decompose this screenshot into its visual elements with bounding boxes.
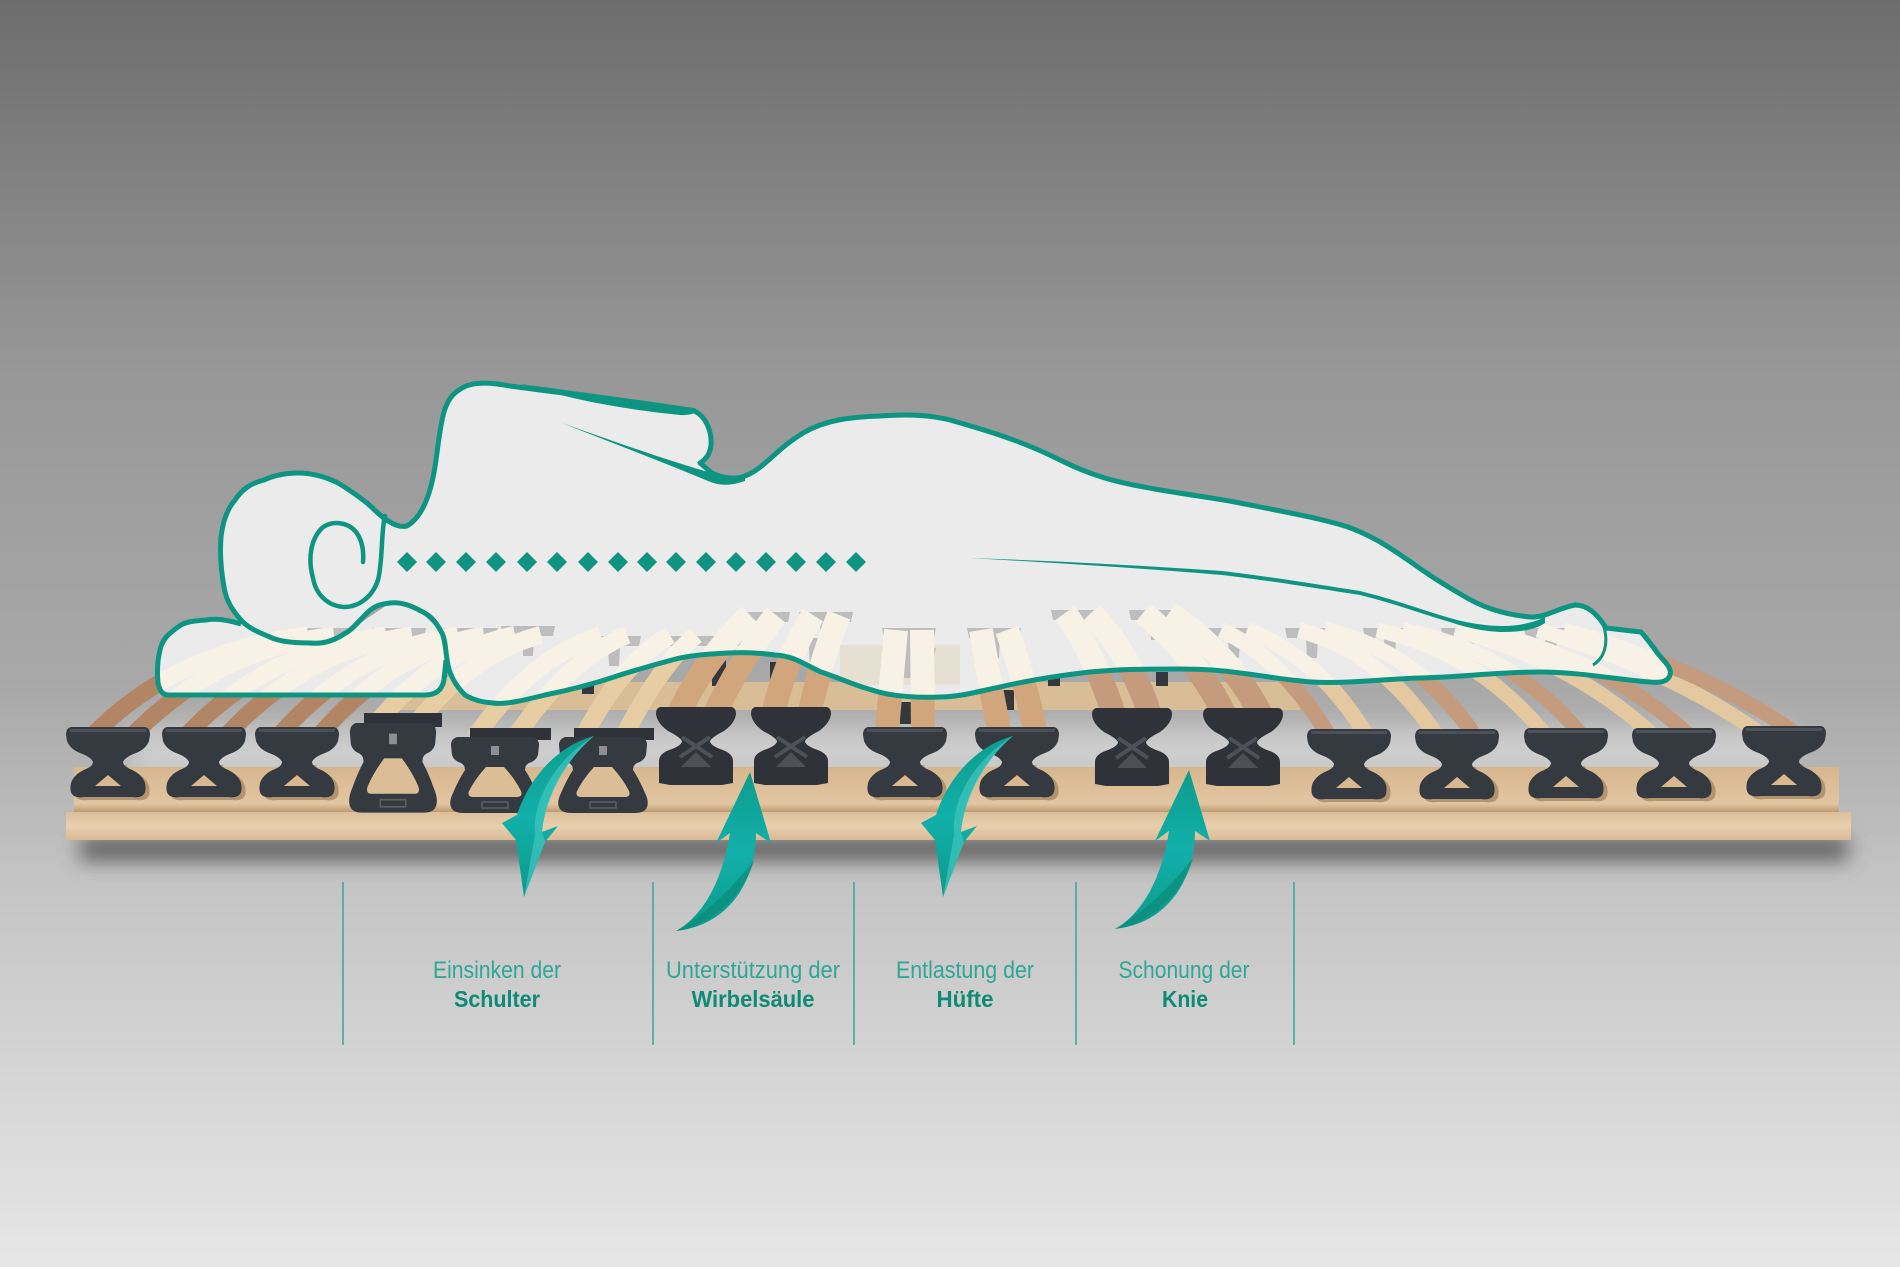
arrow: knee protected upward: [1115, 770, 1210, 929]
label: Schulter: Einsinken der: [433, 957, 561, 984]
frame drop shadow: [80, 838, 1848, 860]
ghosted slats seen through the figure: [160, 604, 1668, 701]
label: Schulter: [433, 957, 561, 1012]
spine diamonds: [397, 552, 866, 572]
label: Hüfte: Hüfte: [936, 986, 994, 1012]
label: Knie: Knie: [1162, 986, 1208, 1012]
leg line: [970, 558, 1545, 632]
lower front rail: [66, 812, 1851, 840]
label: Wirbelsäule: Unterstützung der: [666, 957, 840, 984]
sleeping figure silhouette: [155, 380, 1673, 706]
body fill: [220, 383, 1670, 703]
column divider lines: [343, 882, 1294, 1045]
label: Wirbelsäule: [666, 957, 840, 1012]
wooden slats: [90, 613, 1802, 738]
slatted bed frame: [66, 613, 1851, 860]
label: Wirbelsäule: Wirbelsäule: [692, 986, 814, 1012]
arrow: spine supported upward: [676, 772, 771, 931]
slat holders: [66, 707, 1826, 813]
arrow: hip relieved downward: [921, 736, 1013, 897]
back rail: [400, 682, 1300, 710]
arrow: shoulder sinks down: [502, 736, 594, 897]
foot line: [1593, 624, 1606, 665]
label: Knie: [1118, 957, 1250, 1012]
ear spiral: [310, 516, 385, 607]
label: Hüfte: [896, 957, 1034, 1012]
figure outline: [157, 383, 1670, 703]
arm and shoulder accents: [520, 384, 745, 485]
upper front rail: [74, 767, 1839, 813]
dark mechanism parts behind slats: [582, 660, 1168, 724]
label: Hüfte: Entlastung der: [896, 957, 1034, 984]
label: Schulter: Schulter: [454, 986, 540, 1012]
light glow behind the holders: [130, 728, 1790, 778]
pillow: [157, 603, 446, 695]
label: Knie: Schonung der: [1118, 957, 1250, 984]
